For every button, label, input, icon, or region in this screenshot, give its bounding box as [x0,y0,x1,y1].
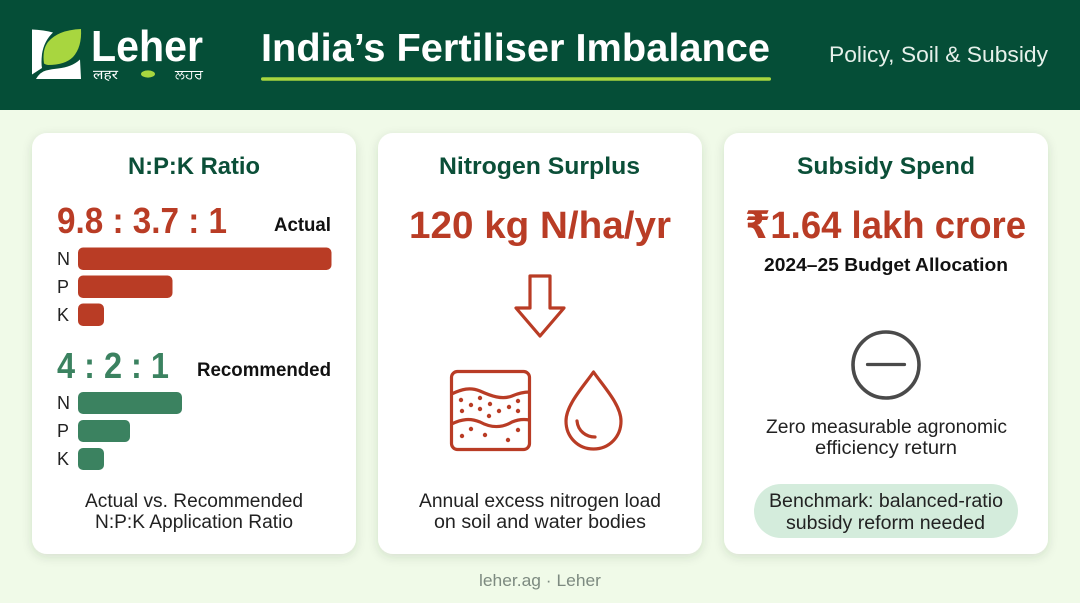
panel heading: Subsidy Spend [797,153,975,180]
budget label: 2024–25 Budget Allocation [764,254,1008,275]
efficiency statement: Zero measurable agronomic [766,417,1007,438]
bar chart: recommended [57,392,182,470]
panel: nitrogen surplus [378,133,702,554]
icon: leaf logo mark [32,29,81,79]
benchmark callout: subsidy reform needed [786,513,985,534]
bar chart: recommended: N [57,393,70,413]
logo wordmark: Leher [91,22,203,71]
panel caption: on soil and water bodies [434,512,646,533]
logo [32,22,204,82]
subtitle: Policy, Soil & Subsidy [829,42,1048,67]
panel heading: Nitrogen Surplus [439,153,640,180]
benchmark callout: Benchmark: balanced-ratio [769,491,1003,512]
panel caption: Annual excess nitrogen load [419,491,661,512]
title underline [261,77,771,81]
panel caption: Actual vs. Recommended [85,491,303,512]
panel caption [85,491,303,533]
recommended label: Recommended [197,360,331,381]
icon: down arrow [516,276,564,336]
footer source: leher.ag · Leher [479,572,602,590]
panel heading: N:P:K Ratio [128,153,260,180]
logo leaf dot [141,70,155,78]
icon: neutral minus circle [853,332,919,398]
efficiency statement [766,417,1007,459]
bar chart: actual: P [57,277,69,297]
panel caption [419,491,661,533]
logo sub-label right: ਲਹਰ [174,67,204,82]
actual label: Actual [274,215,331,236]
icon: soil layers [452,372,530,450]
panel caption: N:P:K Application Ratio [95,512,293,533]
header band [0,0,1080,110]
bar chart: recommended: P [57,421,69,441]
bar chart: recommended: K [57,449,69,469]
logo sub-label left: लहर [93,67,119,82]
panel: N:P:K ratio [32,133,356,554]
subsidy value: ₹1.64 lakh crore [745,205,1026,247]
benchmark callout [754,484,1018,538]
efficiency statement: efficiency return [815,438,957,459]
bar chart: actual [57,248,332,326]
panel: subsidy spend [724,133,1048,554]
surplus value: 120 kg N/ha/yr [409,205,671,247]
bar chart: actual: N [57,249,70,269]
recommended ratio value: 4 : 2 : 1 [57,345,169,386]
title: India’s Fertiliser Imbalance [261,27,770,70]
actual ratio value: 9.8 : 3.7 : 1 [57,200,227,241]
icon: water drop [566,372,621,449]
bar chart: actual: K [57,305,69,325]
